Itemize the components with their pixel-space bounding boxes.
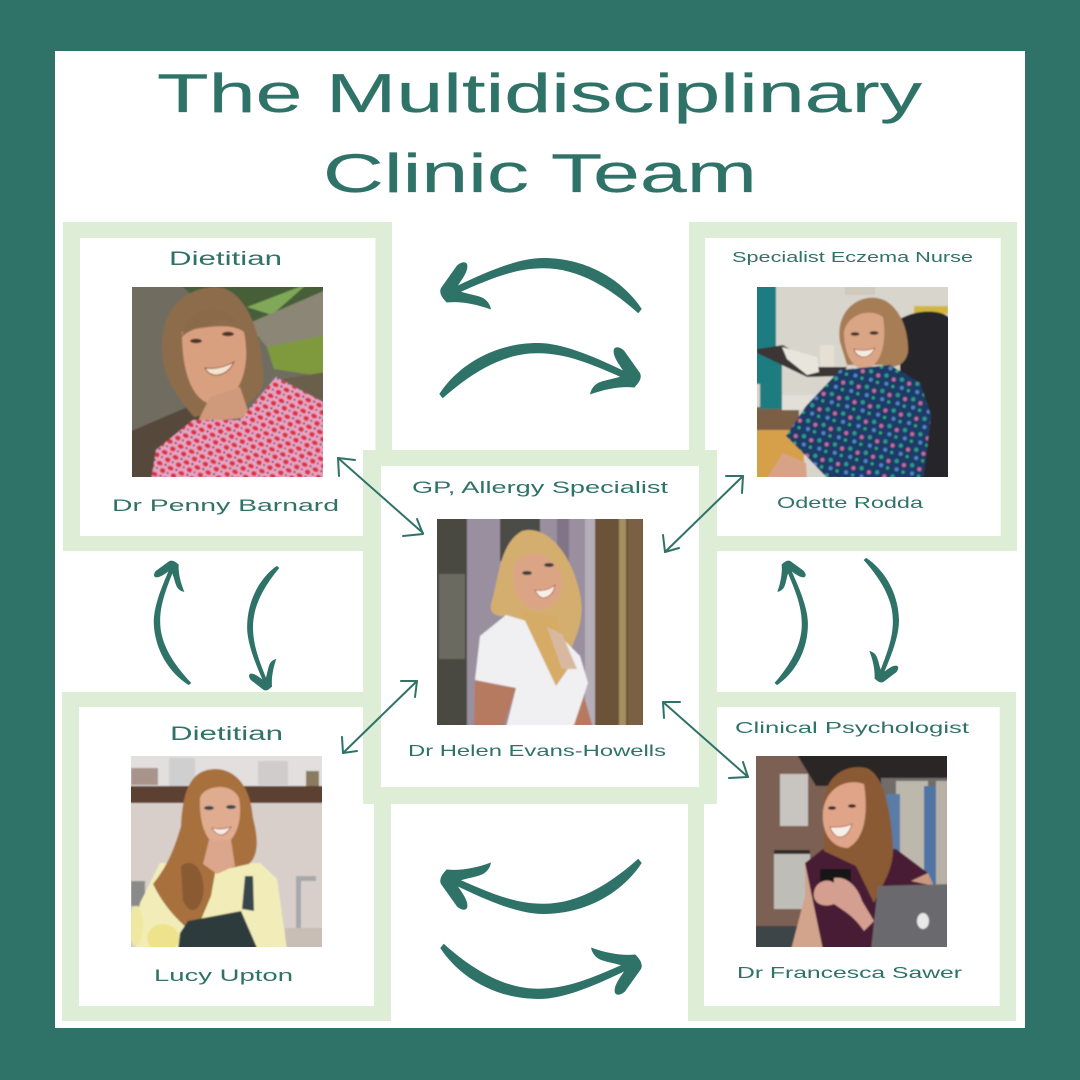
arrow: right side, upward xyxy=(775,561,808,685)
photo: Dr Penny Barnard xyxy=(132,287,323,477)
name: Dr Francesca Sawer: Dr Francesca Sawer xyxy=(737,965,963,982)
role heading: Dietitian: Dietitian xyxy=(169,249,282,270)
arrow: bottom, left to right xyxy=(440,944,642,999)
panel: Dr Francesca Sawer, Clinical Psychologist xyxy=(688,692,1016,1021)
arrow: right side, downward xyxy=(864,558,901,682)
arrow: top, right to left xyxy=(440,258,642,313)
panel: Lucy Upton, Dietitian xyxy=(62,692,391,1021)
role heading: GP, Allergy Specialist: GP, Allergy Specialist xyxy=(412,478,668,497)
name: Dr Penny Barnard: Dr Penny Barnard xyxy=(112,496,339,515)
title: The Multidisciplinary xyxy=(157,62,923,124)
arrow: left side, upward xyxy=(151,561,191,685)
panel: Dr Penny Barnard, Dietitian xyxy=(63,222,392,551)
name: Lucy Upton: Lucy Upton xyxy=(154,966,293,985)
thin double arrow: Lucy to Helen xyxy=(342,681,417,753)
role heading: Specialist Eczema Nurse: Specialist Eczema Nurse xyxy=(732,250,973,266)
panel: Dr Helen Evans-Howells, GP, Allergy Specialist xyxy=(363,450,717,804)
arrow: top, left to right xyxy=(439,343,641,398)
photo: Lucy Upton xyxy=(131,756,322,947)
photo: Dr Helen Evans-Howells xyxy=(437,519,643,725)
arrow: bottom, right to left xyxy=(440,859,642,914)
photo: Dr Francesca Sawer xyxy=(756,756,947,947)
role heading: Dietitian: Dietitian xyxy=(170,724,283,745)
thin double arrow: Francesca to Helen xyxy=(663,702,748,778)
photo: Odette Rodda xyxy=(757,287,948,477)
panel: Odette Rodda, Specialist Eczema Nurse xyxy=(689,222,1017,551)
title xyxy=(157,62,923,204)
title: Clinic Team xyxy=(323,142,757,204)
name: Odette Rodda: Odette Rodda xyxy=(777,495,923,512)
arrow: left side, downward xyxy=(247,566,279,690)
thin double arrow: Penny to Helen xyxy=(338,458,423,536)
thin double arrow: Odette to Helen xyxy=(663,476,743,552)
role heading: Clinical Psychologist: Clinical Psychologist xyxy=(735,720,970,737)
name: Dr Helen Evans-Howells: Dr Helen Evans-Howells xyxy=(408,743,666,760)
